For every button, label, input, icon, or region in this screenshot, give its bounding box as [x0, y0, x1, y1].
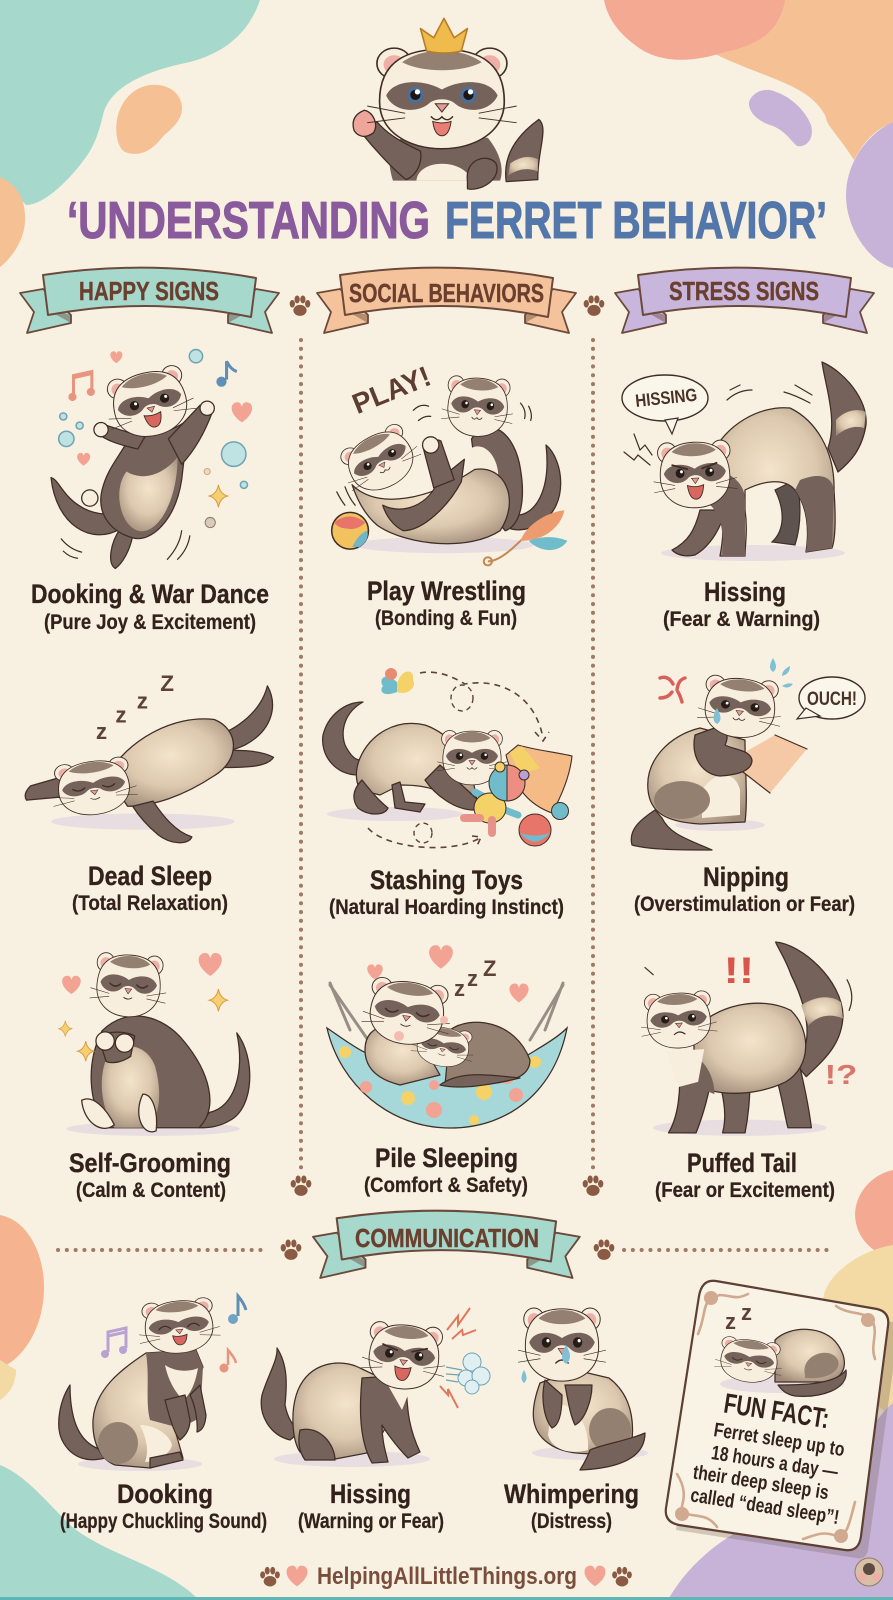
label: self-grooming: Self-Grooming: [69, 1148, 231, 1178]
ferret: hissing communication: [261, 1308, 490, 1467]
footer: HelpingAllLittleThings.org: [317, 1563, 577, 1590]
corner ornaments: [677, 1294, 875, 1539]
label: puffed tail: [655, 1148, 835, 1202]
ferrets: pile sleeping in hammock: z: [454, 976, 465, 1001]
label: dooking sound: (Happy Chuckling Sound): [60, 1510, 267, 1533]
label: whimpering: (Distress): [531, 1510, 612, 1533]
ferret: puffed tail: [639, 942, 857, 1136]
text: zzz: [96, 671, 174, 744]
label: nipping: [634, 862, 855, 916]
paw icons: [281, 295, 614, 1260]
icons: hearts and zzz: [367, 964, 383, 980]
label: stashing toys: (Natural Hoarding Instinct): [329, 896, 564, 919]
label: stashing toys: [329, 865, 564, 919]
icons: balls: [519, 814, 551, 846]
ferrets: pile sleeping in hammock: z: [467, 966, 478, 991]
text: fun fact: Ferret sleep up to: [712, 1419, 846, 1461]
label: hissing stress: Hissing: [704, 577, 786, 607]
speech bubble: ouch: OUCH!: [807, 689, 857, 710]
banner: happy signs: HAPPY SIGNS: [79, 276, 219, 306]
text: zzz: Z: [160, 671, 174, 696]
icon: small logo: [855, 1558, 883, 1586]
banner: stress signs: STRESS SIGNS: [669, 276, 819, 306]
label: hissing stress: (Fear & Warning): [663, 608, 820, 631]
icon: crown: [420, 18, 467, 53]
ferrets: pile sleeping in hammock: Z: [483, 956, 496, 981]
text: zzz: z: [137, 688, 148, 713]
text: fun fact: called “dead sleep”!: [689, 1484, 841, 1529]
icon: feather toy: [488, 536, 526, 561]
ferret: dead sleep: [25, 671, 274, 843]
icon: toy butterfly: [381, 668, 414, 694]
panel: fun fact card: [666, 1281, 893, 1558]
icon: pillow: [506, 745, 572, 813]
banner: happy signs: [20, 268, 279, 333]
ferret: nipping: [631, 658, 865, 850]
label: hissing sound: Hissing: [330, 1479, 411, 1509]
speech bubble: hissing: HISSING: [634, 385, 698, 411]
label: dooking and war dance: [31, 579, 269, 634]
ferret: hissing: [622, 362, 866, 561]
text: play!: PLAY!: [348, 361, 436, 421]
label: hissing sound: [298, 1479, 444, 1533]
icons: hearts and sparkles: [62, 976, 81, 994]
icon: ball: [332, 512, 368, 549]
banner: communication: COMMUNICATION: [355, 1223, 539, 1253]
title: ‘UNDERSTANDING: [67, 192, 430, 250]
label: self-grooming: [69, 1148, 231, 1202]
label: dead sleep: [72, 861, 228, 915]
label: pile sleeping: [364, 1143, 528, 1197]
ferret: dooking and war dance: [51, 350, 252, 568]
icons: notes, hearts, bubbles: [73, 371, 92, 398]
ferret: dooking communication: [59, 1296, 246, 1471]
label: play wrestling: [367, 576, 526, 630]
label: dooking sound: [60, 1479, 267, 1533]
icon: anger mark: [660, 677, 685, 702]
label: dooking sound: Dooking: [117, 1479, 213, 1509]
label: dooking and war dance: Dooking & War Dance: [31, 579, 269, 609]
text: fun fact: 18 hours a day —: [710, 1442, 840, 1483]
ferrets: pile sleeping in hammock: [327, 945, 567, 1128]
icon: tear: [522, 1345, 570, 1383]
label: nipping: (Overstimulation or Fear): [634, 893, 855, 916]
dividers: [58, 340, 835, 1250]
ferret: stashing toys: [323, 668, 572, 848]
speech bubble: hissing: [622, 375, 708, 434]
label: dead sleep: (Total Relaxation): [72, 892, 228, 915]
icons: notes: [108, 1328, 126, 1352]
label: self-grooming: (Calm & Content): [76, 1179, 226, 1202]
banner: social behaviors: SOCIAL BEHAVIORS: [349, 278, 544, 308]
text: fun fact: their deep sleep is: [692, 1462, 830, 1504]
banner: stress signs: [615, 268, 874, 333]
ferret: whimpering: [518, 1308, 648, 1470]
label: dooking and war dance: (Pure Joy & Excitement): [44, 611, 256, 634]
speech bubble: ouch: [797, 677, 865, 719]
title: [67, 192, 827, 250]
label: pile sleeping: (Comfort & Safety): [364, 1174, 528, 1197]
label: stashing toys: Stashing Toys: [370, 865, 523, 895]
icon: sleeping ferret: z: [725, 1309, 736, 1334]
label: hissing stress: [663, 577, 820, 631]
label: puffed tail: (Fear or Excitement): [655, 1179, 835, 1202]
label: pile sleeping: Pile Sleeping: [375, 1143, 518, 1173]
text: zzz: z: [96, 719, 107, 744]
label: nipping: Nipping: [703, 862, 789, 892]
label: whimpering: Whimpering: [504, 1479, 639, 1509]
ferrets: play wrestling: [332, 361, 567, 565]
icon: sleeping ferret: z: [741, 1300, 752, 1325]
icon: paper: [743, 735, 807, 793]
ferret: self-grooming: [59, 952, 250, 1136]
label: play wrestling: (Bonding & Fun): [375, 607, 517, 630]
text: zzz: z: [115, 703, 127, 728]
text: fun fact: FUN FACT:: [722, 1388, 831, 1434]
banner: social behaviors: [317, 268, 576, 333]
text: fun fact: [688, 1384, 856, 1529]
label: dead sleep: Dead Sleep: [88, 861, 212, 891]
icon: sleeping ferret: [713, 1300, 846, 1396]
label: whimpering: [504, 1479, 639, 1533]
arrows: dashed paths: [368, 672, 549, 848]
label: play wrestling: Play Wrestling: [367, 576, 526, 606]
label: puffed tail: Puffed Tail: [687, 1148, 797, 1178]
banner: communication: [313, 1211, 580, 1278]
icons: lightning and puff: [447, 1308, 476, 1339]
mascot ferret with crown: [353, 18, 543, 189]
ferret: puffed tail: !?: [825, 1059, 857, 1090]
label: hissing sound: (Warning or Fear): [298, 1510, 444, 1533]
icons: exclamation marks: !!: [724, 950, 754, 991]
icon: sweat drops: [714, 658, 793, 724]
icon: teddy toy: [464, 762, 529, 833]
